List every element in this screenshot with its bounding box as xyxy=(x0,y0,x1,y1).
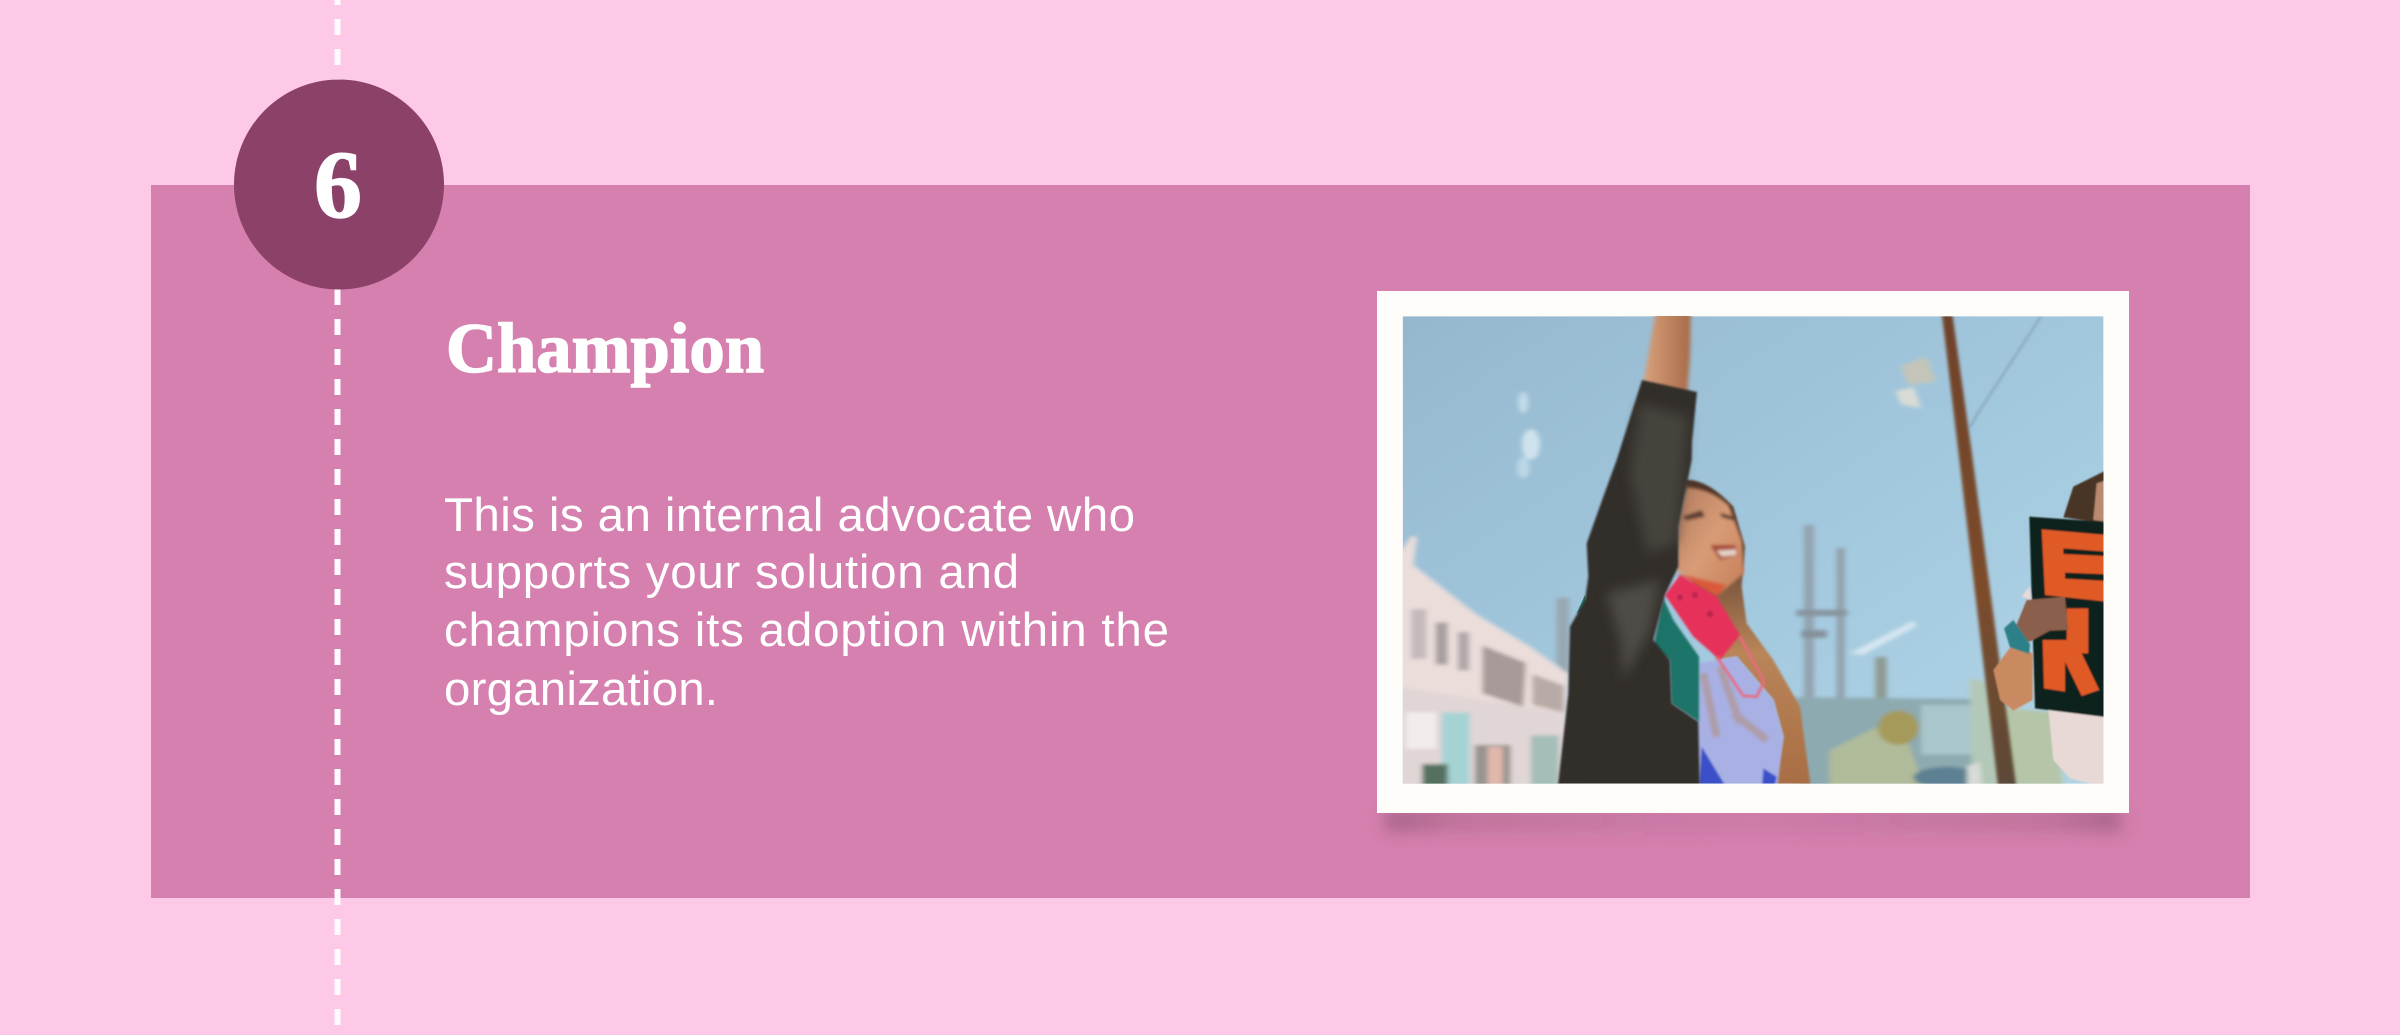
description text: organization. xyxy=(444,663,718,716)
photo frame shadow xyxy=(1385,808,2121,832)
description text: supports your solution and xyxy=(444,546,1019,599)
number badge: 6 xyxy=(314,131,362,238)
number badge xyxy=(234,80,444,290)
shirt xyxy=(1698,657,1783,793)
small teal scarf edge xyxy=(1577,595,1587,613)
sleeve highlight xyxy=(1607,580,1660,680)
description text xyxy=(444,489,1169,716)
hand xyxy=(2012,597,2068,642)
E cutouts xyxy=(2063,548,2107,556)
photo frame xyxy=(1377,291,2129,813)
woman with raised arm xyxy=(1557,380,1812,797)
description text: This is an internal advocate who xyxy=(444,489,1135,542)
person holding sign xyxy=(1993,470,2107,788)
sign letter R xyxy=(2043,608,2099,696)
photo subjects clip xyxy=(1557,300,2107,797)
description text: champions its adoption within the xyxy=(444,604,1169,657)
sign xyxy=(2029,517,2107,717)
raised arm xyxy=(1642,316,1694,391)
upper sleeve xyxy=(2022,587,2032,600)
red face mask xyxy=(1665,575,1764,697)
dashed timeline line xyxy=(334,0,340,1035)
sign letter E xyxy=(2042,529,2107,602)
E lower cutout xyxy=(2065,573,2107,581)
long hair xyxy=(1685,480,1812,793)
neck xyxy=(2092,480,2104,522)
bracelet xyxy=(2004,620,2030,654)
framed photo xyxy=(1377,291,2129,832)
hair xyxy=(2063,470,2107,523)
upper sleeve highlight xyxy=(1630,403,1688,553)
content panel xyxy=(151,185,2250,898)
teal scarf xyxy=(1653,598,1699,722)
white shirt xyxy=(2048,710,2107,788)
face xyxy=(1677,487,1744,597)
dark coat and sleeve xyxy=(1557,380,1700,797)
forearm xyxy=(1993,643,2033,711)
heading: Champion xyxy=(446,310,764,388)
hair strands over shirt xyxy=(1703,667,1767,740)
photo background: sky and street xyxy=(1391,303,2115,793)
